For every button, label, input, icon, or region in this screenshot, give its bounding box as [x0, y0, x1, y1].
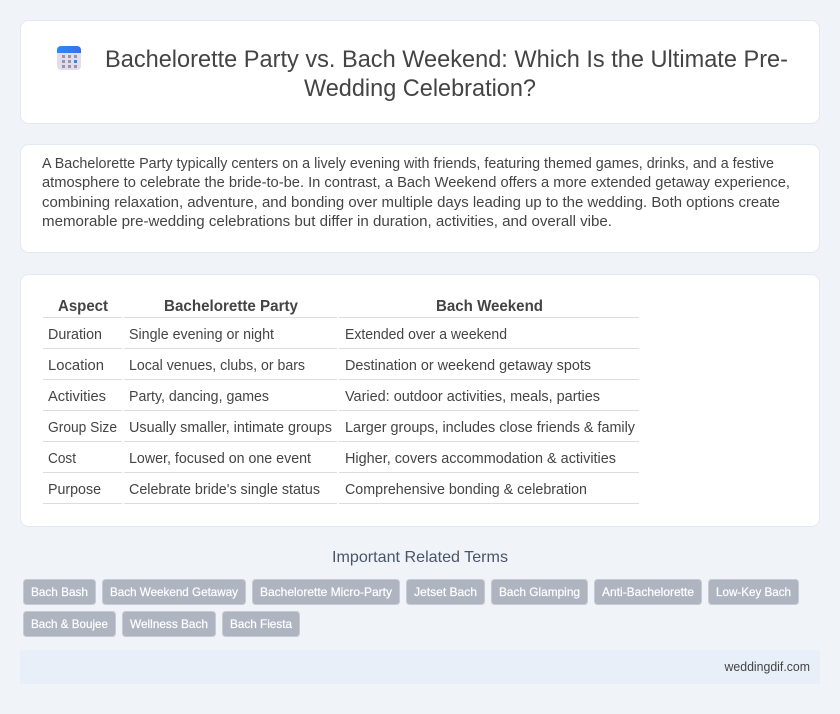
row: location: Local venues, clubs, or bars: [129, 358, 305, 374]
row: location: Location: [48, 358, 104, 374]
tag: Wellness Bach: Wellness Bach: [130, 617, 208, 631]
row: location: Destination or weekend getaway spots: [345, 358, 591, 374]
intro paragraph: A Bachelorette Party typically centers on a lively evening with friends, featuring themed games, drinks, and a festive: [42, 156, 774, 172]
table header: [58, 298, 543, 315]
tag: Bach Weekend Getaway: Bach Weekend Getaway: [110, 585, 238, 599]
row: activities: Activities: [48, 389, 106, 405]
tag: Anti-Bachelorette: Anti-Bachelorette: [602, 585, 694, 599]
tag: Bach & Boujee: [24, 612, 116, 636]
intro paragraph: [42, 156, 790, 230]
tag: Bach Glamping: [492, 580, 588, 604]
tag: Jetset Bach: Jetset Bach: [414, 585, 477, 599]
title: Wedding Celebration?: [304, 75, 536, 102]
tag: Bach Fiesta: [222, 612, 300, 636]
heading: important related terms: Important Related Terms: [332, 549, 508, 566]
related term tags: [24, 580, 798, 636]
tag: Bach Bash: Bach Bash: [31, 585, 88, 599]
row: cost: Lower, focused on one event: [129, 451, 311, 467]
row: group size: [48, 420, 636, 436]
footer: weddingdif.com: [724, 660, 810, 674]
row: purpose: Purpose: [48, 482, 101, 498]
row: duration: Single evening or night: [129, 327, 274, 343]
intro paragraph: memorable pre-wedding celebrations but differ in duration, activities, and overall vibe.: [42, 214, 612, 230]
row: purpose: [48, 482, 587, 498]
row: duration: Extended over a weekend: [345, 327, 507, 343]
tag: Bachelorette Micro-Party: Bachelorette Micro-Party: [260, 585, 392, 599]
tag: Bach Weekend Getaway: [102, 580, 246, 604]
comparison table: [43, 298, 639, 504]
row: activities: [48, 389, 600, 405]
tag: Anti-Bachelorette: [594, 580, 702, 604]
intro paragraph: combining relaxation, adventure, and bonding over multiple days leading up to the wedding. Both options create: [42, 195, 780, 211]
row: duration: Duration: [48, 327, 102, 343]
row: group size: Group Size: [48, 420, 117, 436]
tag: Wellness Bach: [122, 612, 216, 636]
panel: comparison table card: [20, 274, 820, 526]
row: activities: Party, dancing, games: [129, 389, 269, 405]
row: cost: Higher, covers accommodation & activities: [345, 451, 616, 467]
row: duration: [48, 327, 507, 343]
intro paragraph: atmosphere to celebrate the bride-to-be. In contrast, a Bach Weekend offers a more extended getaway experience,: [42, 175, 790, 191]
tag: Bach Bash: [24, 580, 96, 604]
tag: Bachelorette Micro-Party: [252, 580, 400, 604]
tag: Low-Key Bach: [708, 580, 798, 604]
row: cost: Cost: [48, 451, 76, 467]
title: Bachelorette Party vs. Bach Weekend: Which Is the Ultimate Pre-: [105, 46, 788, 73]
row: location: [48, 358, 591, 374]
row: group size: Larger groups, includes close friends & family: [345, 420, 636, 436]
footer: [20, 650, 820, 684]
icon: calendar: [57, 46, 81, 70]
row: cost: [48, 451, 616, 467]
row: purpose: Comprehensive bonding & celebration: [345, 482, 587, 498]
table header: Bachelorette Party: [164, 298, 298, 315]
row: purpose: Celebrate bride's single status: [129, 482, 320, 498]
panel: title card: [20, 20, 820, 124]
tag: Bach Fiesta: Bach Fiesta: [230, 617, 292, 631]
tag: Low-Key Bach: Low-Key Bach: [716, 585, 791, 599]
row: activities: Varied: outdoor activities, meals, parties: [345, 389, 600, 405]
panel: intro text card: [20, 144, 820, 252]
row: group size: Usually smaller, intimate groups: [129, 420, 332, 436]
tag: Bach Glamping: Bach Glamping: [499, 585, 580, 599]
tag: Jetset Bach: [406, 580, 484, 604]
table header: Aspect: [58, 298, 108, 315]
tag: Bach & Boujee: Bach & Boujee: [31, 617, 108, 631]
title: [105, 46, 788, 102]
table header: Bach Weekend: [436, 298, 543, 315]
